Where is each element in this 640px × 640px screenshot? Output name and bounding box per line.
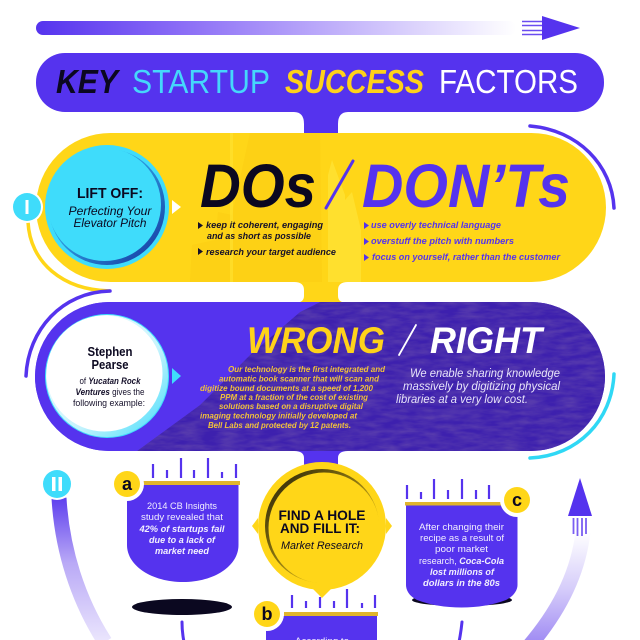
card c bar [405,502,502,506]
stephen pearse circle: Stephen [88,345,132,359]
market research circle: FIND A HOLE [278,507,366,523]
castle silhouette backdrop [230,133,361,282]
right pitch text: massively by digitizing physical [403,381,560,393]
stone pyramid backdrop [35,302,610,451]
card a body [127,485,238,582]
card c text: research, Coca-Cola [419,556,504,567]
card a text [139,501,225,557]
card c text [419,522,504,589]
card a [110,458,240,582]
stephen pearse circle: Pearse [92,358,129,372]
card c text: lost millions of [430,567,495,578]
market research circle: AND FILL IT: [280,520,360,536]
lift off circle [45,145,181,269]
card c text: poor market [435,544,488,555]
card a badge: a [122,474,133,494]
right pitch text: libraries at a very low cost. [396,394,528,406]
cyan arc bottom right [530,374,614,458]
card b bar [284,612,378,616]
RIGHT heading: RIGHT [430,320,545,361]
card b ticks [292,589,375,608]
stephen pearse circle: Ventures gives the [76,387,144,398]
lift off circle: Elevator Pitch [74,216,147,230]
upward gradient arrow [530,478,592,640]
title banner [36,53,604,134]
card a text: due to a lack of [149,535,216,546]
DOs heading: DOs [200,152,316,220]
card c text: dollars in the 80s [423,578,500,589]
top progress arrow [36,16,580,40]
panel: wrong and right [35,302,610,451]
card c text: recipe as a result of [420,533,504,544]
wrong pitch text [200,364,386,430]
stephen pearse circle: following example: [73,398,145,409]
connector c [459,622,462,640]
black hole c [412,594,512,606]
card c text: After changing their [419,522,504,533]
title banner: SUCCESS [285,64,424,101]
stephen pearse circle: of Yucatan Rock [80,376,141,387]
card b [250,589,378,640]
wrong pitch text: imaging technology initially developed at [200,410,358,420]
right pitch text [396,368,560,406]
DONTs heading: DON’Ts [362,152,570,220]
dos list: research your target audience [206,247,337,258]
dos list: and as short as possible [207,231,312,242]
title banner: STARTUP [132,64,270,101]
card a text: 42% of startups fail [139,524,225,535]
market research circle [252,462,392,598]
wrong pitch text: digitize bound documents at a speed of 1,200 [200,383,373,393]
WRONG heading: WRONG [247,320,385,361]
stem between panels [294,282,348,303]
lift off circle: LIFT OFF: [77,185,143,202]
card a text: study revealed that [141,512,223,523]
card c body [406,506,518,608]
card c ticks [407,479,489,499]
section badge II with gradient arc [41,468,105,640]
black hole a [132,599,232,615]
donts list: use overly technical language [371,220,502,231]
donts list: overstuff the pitch with numbers [371,236,514,247]
title banner: KEY [56,64,120,101]
card c [405,479,534,608]
card a ticks [153,458,236,478]
slash [326,161,353,208]
wrong pitch text: PPM at a fraction of the cost of existing [220,392,369,402]
wrong pitch text: Our technology is the first integrated and [228,364,386,374]
wrong pitch text: solutions based on a disruptive digital [219,401,364,411]
market research circle: Market Research [281,540,363,552]
section badge I with yellow arc [11,191,110,291]
lift off circle: Perfecting Your [68,204,153,218]
purple arc top right [530,126,614,208]
stem to market research circle [294,451,348,466]
slash [399,325,416,355]
card b badge: b [262,604,272,624]
card a bar [143,481,240,485]
right pitch text: We enable sharing knowledge [410,368,560,380]
title banner: FACTORS [439,64,578,101]
dos list: keep it coherent, engaging [206,220,323,231]
card b body [266,616,377,640]
card c badge: c [512,490,522,510]
wrong pitch text: Bell Labs and protected by 12 patents. [208,420,351,430]
dos list [198,220,337,258]
wrong pitch text: automatic book scanner that will scan and [219,374,380,384]
panel: lift off dos and donts [36,133,606,303]
donts list: focus on yourself, rather than the customer [372,252,561,263]
connector a [182,622,184,640]
donts list [364,220,561,263]
stephen pearse circle [45,314,181,438]
card a text: 2014 CB Insights [147,501,217,512]
card a text: market need [155,546,209,557]
purple arc left [26,291,110,376]
